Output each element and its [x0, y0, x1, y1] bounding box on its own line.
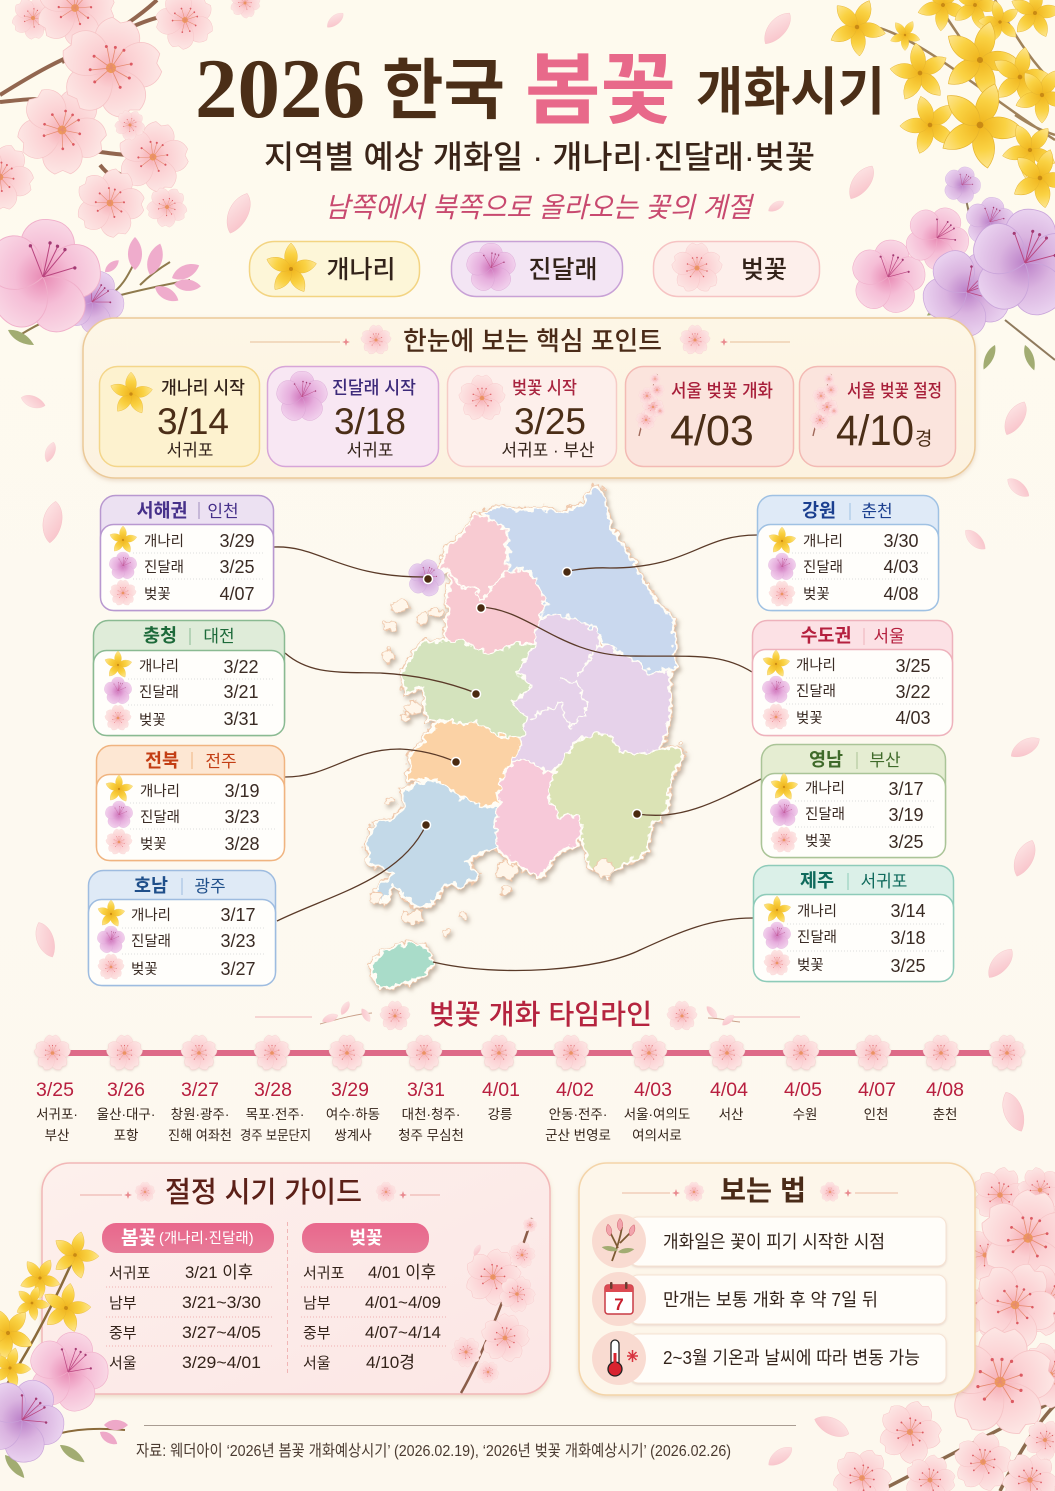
region card: Chungcheong / Daejeon: 개나리 [139, 658, 179, 675]
region card: Gangwon / Chuncheon: 4/03 [883, 557, 919, 577]
chart: cherry blossom timeline: 진해 여좌천 [168, 1128, 232, 1143]
spring flowers column: 봄꽃 [121, 1227, 156, 1249]
region card: Jeju / Seogwipo: 개나리 [797, 903, 837, 920]
map dots [422, 568, 642, 830]
decoration: top left cherry blossom branch [0, 0, 265, 250]
panel: peak period guide [42, 1163, 550, 1394]
chart: cherry blossom timeline: 4/04 [710, 1079, 748, 1101]
region card: Chungcheong / Daejeon: 충청 [143, 625, 177, 646]
region card: Seohae / Incheon: 개나리 [144, 533, 184, 550]
region card: Chungcheong / Daejeon: 3/22 [223, 657, 259, 677]
region card: Sudogwon / Seoul: 3/25 [895, 656, 931, 676]
title: 봄꽃 [525, 46, 676, 134]
region card: Honam / Gwangju: 진달래 [131, 933, 171, 950]
region card: Gangwon / Chuncheon: 춘천 [861, 502, 893, 521]
card: azalea start: 서귀포 [347, 441, 393, 460]
map: Incheon flower marker [401, 555, 450, 603]
region card: Seohae / Incheon: 3/29 [219, 531, 255, 551]
heading ornament [250, 325, 790, 356]
spring flowers column: 남부 [109, 1295, 137, 1312]
chart: cherry blossom timeline: 포항 [114, 1128, 138, 1143]
connector: Yeongnam [637, 779, 761, 815]
cherry column: 벚꽃 [349, 1228, 383, 1248]
chart: cherry blossom timeline: 4/07 [858, 1079, 896, 1101]
legend: flower types [250, 242, 820, 296]
region card: Chungcheong / Daejeon: 3/21 [223, 682, 259, 702]
card: forsythia start [100, 366, 260, 466]
chart: cherry blossom timeline: 3/25 [36, 1079, 74, 1101]
spring flowers column: 중부 [109, 1325, 137, 1342]
connector: Gangwon [567, 535, 757, 571]
region card: Yeongnam / Busan: 진달래 [805, 806, 845, 823]
chart: cherry blossom timeline: 부산 [45, 1128, 69, 1143]
connector: Sudogwon [481, 607, 752, 672]
region card: Jeju / Seogwipo: 서귀포 [861, 872, 907, 891]
card: azalea start: 진달래 시작 [332, 378, 416, 398]
heading: key points: 한눈에 보는 핵심 포인트 [403, 326, 662, 356]
legend pill: azalea: 진달래 [528, 256, 598, 284]
spring flowers column: 3/27~4/05 [182, 1323, 261, 1342]
chart: cherry blossom timeline: 4/08 [926, 1079, 964, 1101]
heading ornament [80, 1182, 440, 1203]
region card: Sudogwon / Seoul [752, 620, 952, 736]
cherry column: 서울 [303, 1355, 331, 1372]
region card: Yeongnam / Busan: 3/25 [888, 832, 924, 852]
card: seoul cherry opening: 4/03 [670, 407, 754, 455]
legend pill: cherry blossom [654, 242, 820, 296]
chart: cherry blossom timeline: 4/05 [784, 1079, 822, 1101]
region card: Yeongnam / Busan: 3/17 [888, 779, 924, 799]
chart: cherry blossom timeline: 창원·광주· [171, 1107, 229, 1122]
region card: Jeju / Seogwipo: 3/25 [890, 956, 926, 976]
region card: Jeju / Seogwipo [754, 866, 954, 982]
chart: cherry blossom timeline: 3/29 [331, 1079, 369, 1101]
region card: Jeju / Seogwipo: 벚꽃 [797, 957, 824, 974]
icon: calendar: 7 [614, 1295, 624, 1314]
chart: cherry blossom timeline: 3/26 [107, 1079, 145, 1101]
chart: cherry blossom timeline: 군산 번영로 [545, 1128, 611, 1143]
chart: cherry blossom timeline: 울산·대구· [97, 1107, 155, 1122]
region card: Seohae / Incheon: 서해권 [136, 500, 188, 521]
row: weather variation: 2~3월 기온과 날씨에 따라 변동 가능 [663, 1348, 920, 1368]
region card: Honam / Gwangju: 3/27 [220, 959, 256, 979]
heading: peak guide: 절정 시기 가이드 [165, 1176, 362, 1209]
title: 개화시기 [696, 64, 885, 122]
region card: Gangwon / Chuncheon: 개나리 [803, 533, 843, 550]
cherry column: 4/01 이후 [368, 1263, 436, 1282]
card: seoul cherry peak [800, 366, 956, 466]
chart: cherry blossom timeline: 3/27 [181, 1079, 219, 1101]
connector: Jeonbuk [285, 749, 456, 777]
region card: Honam / Gwangju [88, 870, 276, 986]
row: full bloom [630, 1275, 946, 1324]
region card: Gangwon / Chuncheon [758, 496, 938, 610]
heading ornament [622, 1182, 898, 1203]
region card: Seohae / Incheon: 인천 [207, 502, 239, 521]
region card: Sudogwon / Seoul: 진달래 [796, 683, 836, 700]
icon: flower buds [592, 1214, 646, 1268]
row: opening definition [630, 1217, 946, 1266]
panel: key points [83, 318, 975, 478]
chart: cherry blossom timeline: 청주 무심천 [398, 1128, 464, 1143]
chart: cherry blossom timeline [33, 1035, 1027, 1143]
title: 2026 [195, 42, 365, 136]
chart: cherry blossom timeline: 4/02 [556, 1079, 594, 1101]
region card: Yeongnam / Busan: 영남 [809, 749, 843, 770]
panel: how to read [579, 1163, 975, 1395]
chart: cherry blossom timeline: 춘천 [933, 1107, 957, 1122]
region card: Seohae / Incheon: 4/07 [219, 584, 255, 604]
region card: Sudogwon / Seoul: 서울 [873, 627, 905, 646]
source text: 자료: 웨더아이 ‘2026년 봄꽃 개화예상시기’ (2026.02.19), ‘2026년 벚꽃 개화예상시기’ (2026.02.26) [136, 1442, 731, 1460]
region card: Jeonbuk / Jeonju: 개나리 [140, 783, 180, 800]
region card: Gangwon / Chuncheon: 강원 [802, 500, 836, 521]
region card: Jeju / Seogwipo: 3/18 [890, 928, 926, 948]
legend pill: forsythia [250, 242, 420, 296]
region card: Jeonbuk / Jeonju: 3/19 [224, 781, 260, 801]
cherry column: 남부 [303, 1295, 331, 1312]
region card: Chungcheong / Daejeon: 3/31 [223, 709, 259, 729]
region card: Sudogwon / Seoul: 4/03 [895, 708, 931, 728]
region card: Sudogwon / Seoul: 개나리 [796, 657, 836, 674]
card: forsythia start: 3/14 [157, 401, 229, 442]
subtitle: 지역별 예상 개화일 · 개나리·진달래·벚꽃 [264, 139, 815, 175]
spring flowers column: 서귀포 [109, 1265, 151, 1282]
card: seoul cherry peak: 4/10 [836, 407, 914, 455]
cherry column: 4/07~4/14 [365, 1323, 441, 1342]
chart: cherry blossom timeline: 4/01 [482, 1079, 520, 1101]
region card: Chungcheong / Daejeon: 대전 [203, 627, 235, 646]
region card: Gangwon / Chuncheon: 벚꽃 [803, 586, 830, 603]
region card: Chungcheong / Daejeon: 진달래 [139, 684, 179, 701]
legend pill: azalea [452, 242, 622, 296]
icon: thermometer [592, 1331, 646, 1385]
cherry column: 서귀포 [303, 1265, 345, 1282]
region card: Yeongnam / Busan: 개나리 [805, 780, 845, 797]
connector: Chungcheong [285, 653, 476, 693]
row: weather variation [630, 1334, 946, 1383]
region card: Sudogwon / Seoul: 3/22 [895, 682, 931, 702]
region card: Jeju / Seogwipo: 3/14 [890, 901, 926, 921]
decoration: left azalea cluster [0, 211, 202, 349]
decoration: bottom left forsythia and azalea [0, 1226, 128, 1483]
heading ornament: timeline [255, 1000, 800, 1032]
spring flowers column [102, 1223, 274, 1372]
chart: cherry blossom timeline: 서귀포· [36, 1107, 78, 1122]
decoration: top right forsythia branches [818, 0, 1055, 217]
chart: cherry blossom timeline: 쌍계사 [334, 1128, 372, 1143]
card: seoul cherry opening: 서울 벚꽃 개화 [671, 381, 773, 401]
region card: Gangwon / Chuncheon: 4/08 [883, 584, 919, 604]
cherry column [301, 1223, 448, 1372]
region card: Chungcheong / Daejeon: 벚꽃 [139, 712, 166, 729]
legend pill: forsythia: 개나리 [326, 256, 396, 284]
card: seoul cherry opening [626, 366, 794, 466]
region card: Honam / Gwangju: 호남 [134, 875, 168, 896]
decoration: bottom petals [765, 1411, 852, 1470]
chart: cherry blossom timeline: 대천·청주· [402, 1107, 460, 1122]
chart: cherry blossom timeline: 서울·여의도 [624, 1107, 690, 1122]
spring flowers column: 3/29~4/01 [182, 1353, 261, 1372]
region card: Jeju / Seogwipo: 제주 [800, 870, 834, 891]
card: forsythia start: 개나리 시작 [161, 378, 245, 398]
chart: cherry blossom timeline: 여의서로 [632, 1128, 682, 1143]
cherry column: 4/01~4/09 [365, 1293, 441, 1312]
spring flowers column: (개나리·진달래) [159, 1230, 254, 1247]
chart: cherry blossom timeline: 안동·전주· [549, 1107, 607, 1122]
region card: Jeonbuk / Jeonju: 3/23 [224, 807, 260, 827]
region card: Seohae / Incheon: 진달래 [144, 559, 184, 576]
chart: cherry blossom timeline: 강릉 [488, 1107, 512, 1122]
region card: Jeonbuk / Jeonju: 진달래 [140, 809, 180, 826]
region card: Honam / Gwangju: 3/23 [220, 931, 256, 951]
connector: Honam [277, 825, 426, 921]
region card: Sudogwon / Seoul: 수도권 [800, 625, 852, 646]
region card: Honam / Gwangju: 벚꽃 [131, 961, 158, 978]
region card: Jeju / Seogwipo: 진달래 [797, 929, 837, 946]
cherry column: 중부 [303, 1325, 331, 1342]
region card: Yeongnam / Busan [762, 744, 946, 858]
spring flowers column: 3/21 이후 [185, 1263, 253, 1282]
chart: cherry blossom timeline: 인천 [864, 1107, 888, 1122]
icon: tagline petal [766, 198, 786, 214]
card: seoul cherry peak: 서울 벚꽃 절정 [847, 381, 942, 401]
region card: Yeongnam / Busan: 부산 [869, 751, 901, 770]
region card: Yeongnam / Busan: 벚꽃 [805, 833, 832, 850]
card: cherry start [448, 366, 616, 466]
heading: cherry timeline: 벚꽃 개화 타임라인 [429, 999, 652, 1030]
chart: cherry blossom timeline: 여수·하동 [326, 1107, 380, 1122]
region card: Gangwon / Chuncheon: 3/30 [883, 531, 919, 551]
region card: Chungcheong / Daejeon [94, 620, 284, 736]
card: cherry start: 벚꽃 시작 [512, 378, 577, 398]
card: forsythia start: 서귀포 [167, 441, 213, 460]
title: 한국 [382, 53, 505, 127]
chart: cherry blossom timeline: 목포·전주· [246, 1107, 304, 1122]
card: cherry start: 서귀포 · 부산 [501, 441, 595, 460]
connector: Jeju [433, 918, 753, 971]
card: cherry start: 3/25 [514, 401, 586, 442]
chart: cherry blossom timeline: 3/28 [254, 1079, 292, 1101]
region card: Jeonbuk / Jeonju: 벚꽃 [140, 836, 167, 853]
region card: Jeonbuk / Jeonju: 전북 [145, 750, 179, 771]
card: seoul cherry peak: 경 [915, 428, 932, 450]
tagline: 남쪽에서 북쪽으로 올라오는 꽃의 계절 [325, 192, 754, 223]
decoration: scattered petals top [19, 8, 1043, 1135]
region card: Honam / Gwangju: 광주 [194, 877, 226, 896]
region card: Gangwon / Chuncheon: 진달래 [803, 559, 843, 576]
region card: Honam / Gwangju: 3/17 [220, 905, 256, 925]
region card: Seohae / Incheon [100, 496, 274, 610]
cherry column: 4/10경 [366, 1353, 415, 1372]
title [195, 42, 885, 136]
region card: Jeonbuk / Jeonju: 3/28 [224, 834, 260, 854]
source rule [144, 1424, 796, 1426]
card: azalea start: 3/18 [334, 401, 406, 442]
spring flowers column: 서울 [109, 1355, 137, 1372]
card: azalea start [268, 366, 438, 466]
row: opening definition: 개화일은 꽃이 피기 시작한 시점 [663, 1232, 885, 1252]
heading: how to read: 보는 법 [720, 1175, 806, 1206]
chart: cherry blossom timeline: 수원 [793, 1107, 817, 1122]
chart: cherry blossom timeline: 3/31 [407, 1079, 445, 1101]
chart: cherry blossom timeline: 경주 보문단지 [240, 1128, 311, 1143]
region card: Seohae / Incheon: 3/25 [219, 557, 255, 577]
row: full bloom: 만개는 보통 개화 후 약 7일 뒤 [663, 1290, 878, 1310]
decoration: right azalea cluster [841, 161, 1055, 372]
legend pill: cherry blossom: 벚꽃 [741, 256, 787, 284]
decoration: bottom right cherry blossoms [819, 1157, 1055, 1491]
region card: Yeongnam / Busan: 3/19 [888, 805, 924, 825]
region card: Honam / Gwangju: 개나리 [131, 907, 171, 924]
region card: Jeonbuk / Jeonju [96, 746, 284, 860]
region card: Sudogwon / Seoul: 벚꽃 [796, 710, 823, 727]
chart: cherry blossom timeline: 서산 [719, 1107, 743, 1122]
region card: Seohae / Incheon: 벚꽃 [144, 586, 171, 603]
connector: Seohae [274, 547, 428, 577]
chart: cherry blossom timeline: 4/03 [634, 1079, 672, 1101]
decoration: cherry sprig in guide [443, 1217, 543, 1393]
region card: Jeonbuk / Jeonju: 전주 [205, 752, 237, 771]
icon: calendar [592, 1272, 646, 1326]
spring flowers column: 3/21~3/30 [182, 1293, 261, 1312]
map: South Korea regions [367, 485, 683, 989]
